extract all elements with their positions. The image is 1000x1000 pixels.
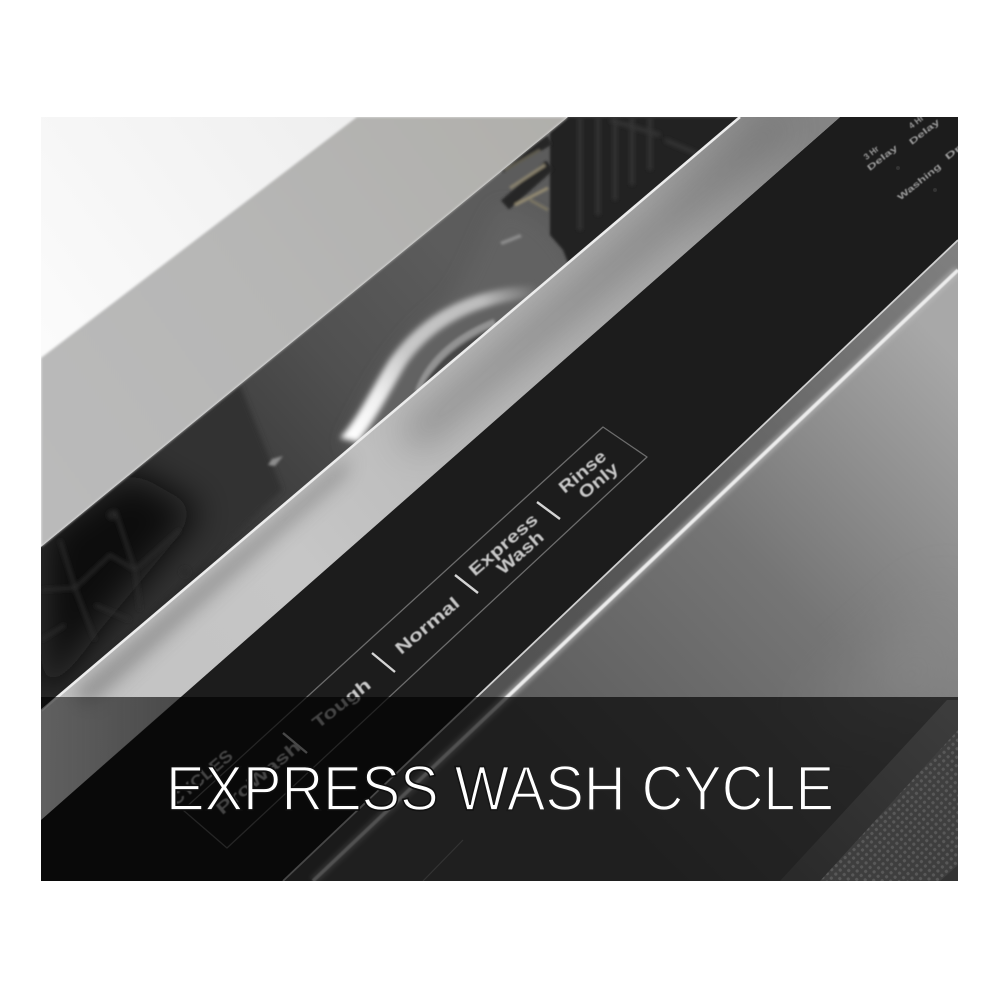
label: rinse: Rinse xyxy=(555,447,610,497)
title: EXPRESS WASH CYCLE xyxy=(166,754,834,824)
label: cycles: CYCLES xyxy=(166,746,237,809)
lower trim strip under band xyxy=(780,700,958,881)
bowl xyxy=(348,318,476,447)
bright highlight arc xyxy=(340,285,535,442)
white countertop xyxy=(41,117,568,272)
dishwasher interior xyxy=(41,117,745,717)
status: dry: Dry xyxy=(943,137,970,162)
rack tangle xyxy=(500,140,550,210)
label: tough: Tough xyxy=(309,675,375,732)
cycle labels xyxy=(166,447,623,818)
upper rack xyxy=(550,117,745,268)
countertop edge band xyxy=(41,117,568,547)
handle recess line xyxy=(423,840,463,881)
label: only: Only xyxy=(575,458,623,503)
lower stainless door xyxy=(313,270,958,881)
bottom caption band xyxy=(41,697,958,881)
status labels xyxy=(863,117,958,200)
label: express: Express xyxy=(465,510,542,580)
lower rack wires xyxy=(51,510,148,638)
trim channel between edges xyxy=(283,240,958,881)
photo: dishwasher control panel xyxy=(41,110,970,881)
status: delay: Delay xyxy=(865,142,900,173)
silver glow under band xyxy=(41,697,180,820)
label: pro wash: ProWash xyxy=(213,737,304,818)
door top edge highlight xyxy=(41,117,740,711)
cycle selector outline xyxy=(183,427,647,848)
status: washing: Washing xyxy=(895,161,943,202)
black control panel xyxy=(41,117,958,881)
label: wash: Wash xyxy=(493,527,548,578)
perforated vent texture xyxy=(820,730,958,881)
status lights xyxy=(896,166,937,192)
bowl ring detail xyxy=(418,322,495,392)
door bright crease line xyxy=(313,270,958,881)
label: normal: Normal xyxy=(391,593,463,658)
status: 4 hr: 4 Hr xyxy=(907,112,926,131)
stainless door trim band xyxy=(41,110,840,820)
infographic canvas xyxy=(41,117,958,881)
cycle separators xyxy=(283,502,560,753)
status: 3 hr: 3 Hr xyxy=(862,143,881,162)
small bowl marks xyxy=(268,234,522,466)
panel lower edge line xyxy=(283,240,958,881)
status: delay 2: Delay xyxy=(907,116,942,147)
door crease glow xyxy=(313,270,958,881)
